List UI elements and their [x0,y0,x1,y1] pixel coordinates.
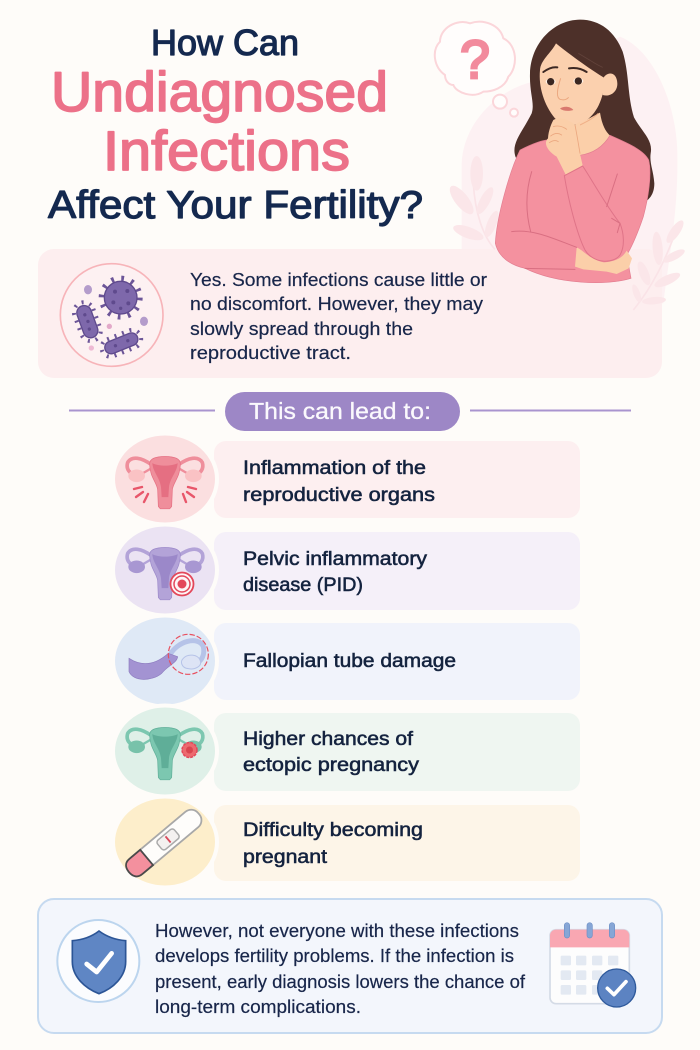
label: Inflammation of the [243,457,426,479]
label: reproductive organs [243,484,435,506]
label: Difficulty becoming [243,819,423,841]
label: ectopic pregnancy [243,754,419,776]
panel: reassurance note [38,899,662,1033]
intro text: reproductive tract. [190,342,351,363]
intro text: no discomfort. However, they may [190,293,484,314]
card [214,441,580,518]
panel: intro [60,264,487,366]
item 5: difficulty becoming pregnant [113,796,580,888]
title line: How Can: How Can [151,22,299,63]
background arch behind woman [462,37,677,310]
icon: uterus with ectopic spot [113,706,217,796]
title line: Affect Your Fertility?: Affect Your Fertility? [48,184,423,227]
thought bubble with question mark [435,22,518,117]
note text: present, early diagnosis lowers the chance of [155,971,526,992]
intro text [190,269,487,363]
title line: Undiagnosed: Undiagnosed [51,60,388,123]
panel: intro background [38,249,662,378]
label [243,728,419,776]
intro text: slowly spread through the [190,318,413,339]
woman thinking illustration [495,20,654,283]
icon: calendar with check [550,923,636,1007]
title [48,22,423,227]
card [214,805,580,881]
icon: uterus with pain target [113,524,217,616]
section heading: This can lead to [69,392,631,431]
card [214,532,580,610]
card [214,713,580,791]
card [214,623,580,700]
label: Fallopian tube damage [243,650,456,672]
label: Pelvic inflammatory [243,548,427,570]
item 2: PID [113,524,580,616]
item 4: ectopic pregnancy [113,706,580,796]
icon: inflamed uterus [113,434,217,524]
label: Higher chances of [243,728,414,750]
label [243,548,427,596]
label [243,819,423,868]
icon: pregnancy test [113,796,217,888]
label: pregnant [243,846,328,868]
title line: Infections: Infections [103,119,350,182]
icon: microbes in circle [60,264,163,366]
section heading: This can lead to: This can lead to: [249,398,431,424]
note text: long-term complications. [155,996,361,1017]
decorative leaves [446,156,686,310]
icon: damaged tube [113,616,217,706]
intro text: Yes. Some infections cause little or [190,269,487,290]
note text [155,920,526,1017]
note text: However, not everyone with these infections [155,920,519,941]
panel background [38,899,662,1033]
note text: develops fertility problems. If the infection is [155,945,514,966]
thought bubble with question mark: ? [460,31,490,90]
item 3: fallopian tube damage [113,616,580,706]
label [243,457,435,506]
label: disease (PID) [243,574,363,596]
icon: shield with check [57,920,139,1002]
item 1: inflammation [113,434,580,524]
